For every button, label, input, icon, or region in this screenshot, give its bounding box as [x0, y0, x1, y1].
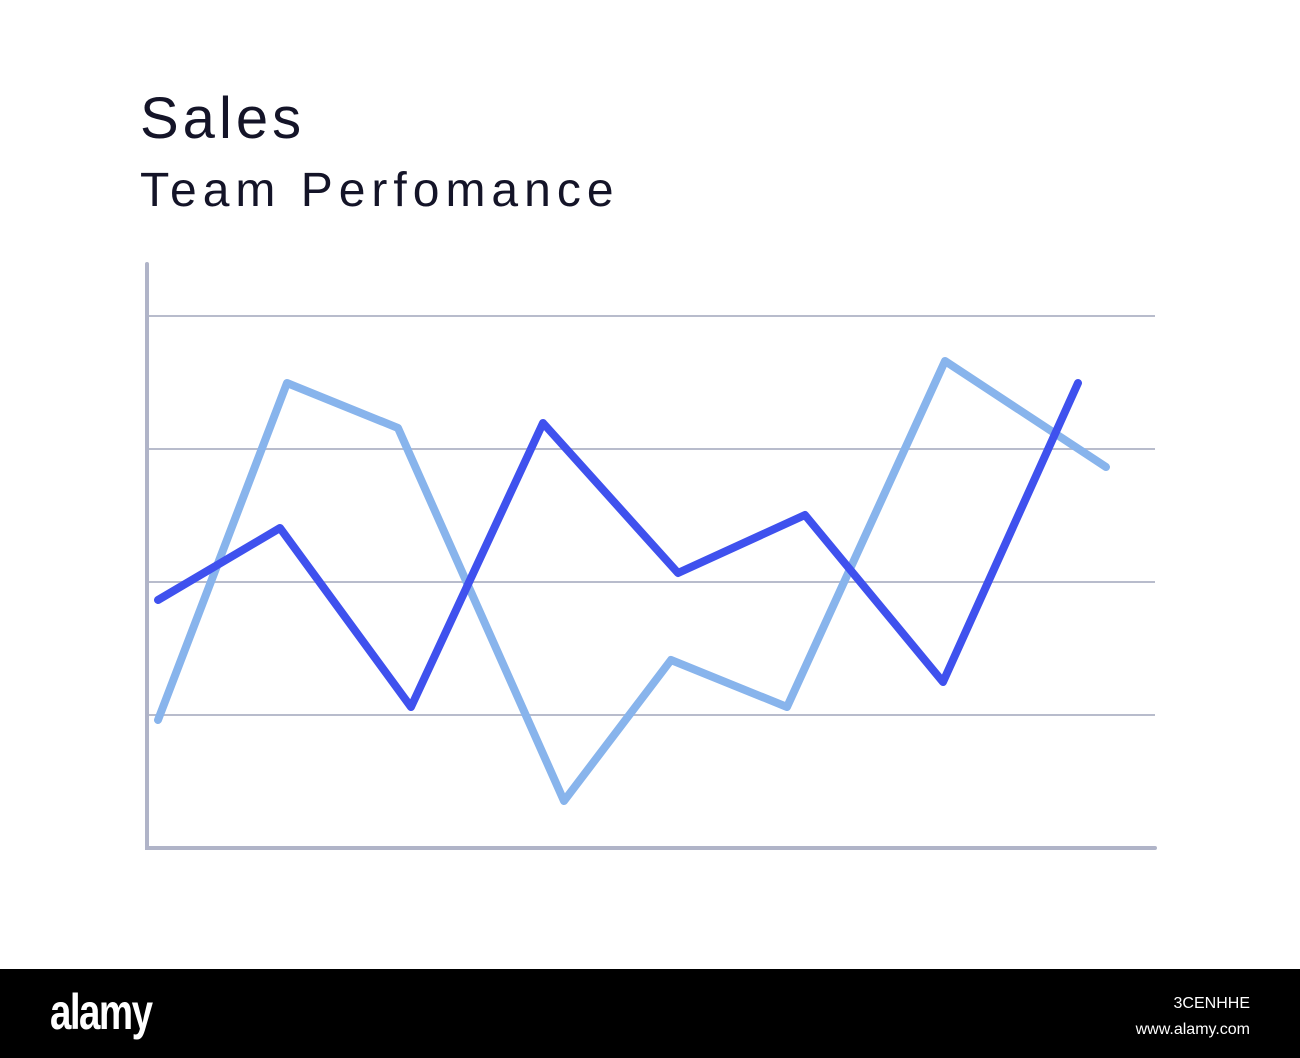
footer id [1136, 995, 1250, 1038]
subtitle: Team Perfomance [140, 164, 620, 217]
footer logo: alamy [50, 984, 151, 1040]
series: light blue [158, 361, 1106, 801]
footer id: www.alamy.com [1136, 1021, 1250, 1038]
title: Sales [140, 86, 305, 151]
footer id: 3CENHHE [1174, 995, 1250, 1012]
footer bar [0, 969, 1300, 1058]
series: dark blue [158, 383, 1078, 707]
